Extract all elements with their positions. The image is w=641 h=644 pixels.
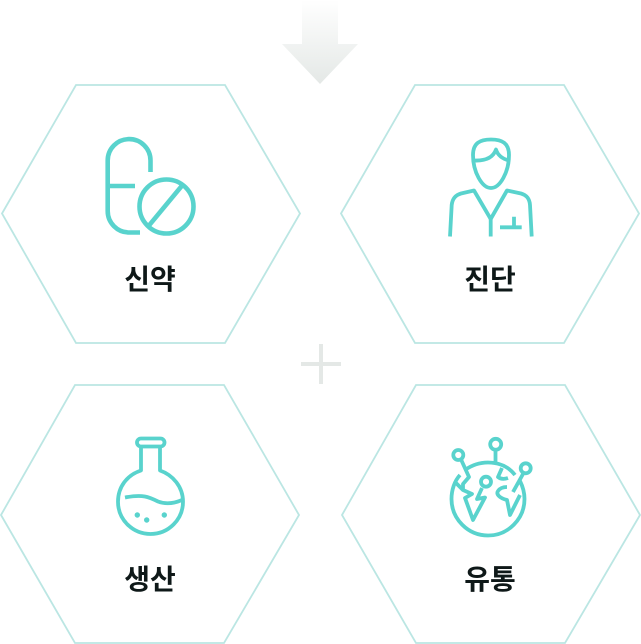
icon: flask xyxy=(118,438,183,534)
hexagon: 진단 xyxy=(341,85,639,343)
panel: 유통 xyxy=(342,385,640,643)
plus sign xyxy=(301,344,341,384)
label: 진단: 진단 xyxy=(464,264,516,295)
icon: globe with pins xyxy=(452,439,531,536)
label: 생산: 생산 xyxy=(124,564,176,595)
panel: 진단 xyxy=(341,85,639,343)
icon: pills xyxy=(108,139,194,234)
arrow: down xyxy=(282,0,358,84)
panel: 생산 xyxy=(1,385,299,643)
label: 유통: 유통 xyxy=(464,564,516,595)
hexagon: 생산 xyxy=(1,385,299,643)
hexagon: 신약 xyxy=(2,85,300,343)
icon: flask bubbles xyxy=(135,512,167,523)
panel: 신약 xyxy=(2,85,300,343)
icon: doctor xyxy=(450,140,532,236)
label: 신약: 신약 xyxy=(124,264,176,295)
hexagon: 유통 xyxy=(342,385,640,643)
